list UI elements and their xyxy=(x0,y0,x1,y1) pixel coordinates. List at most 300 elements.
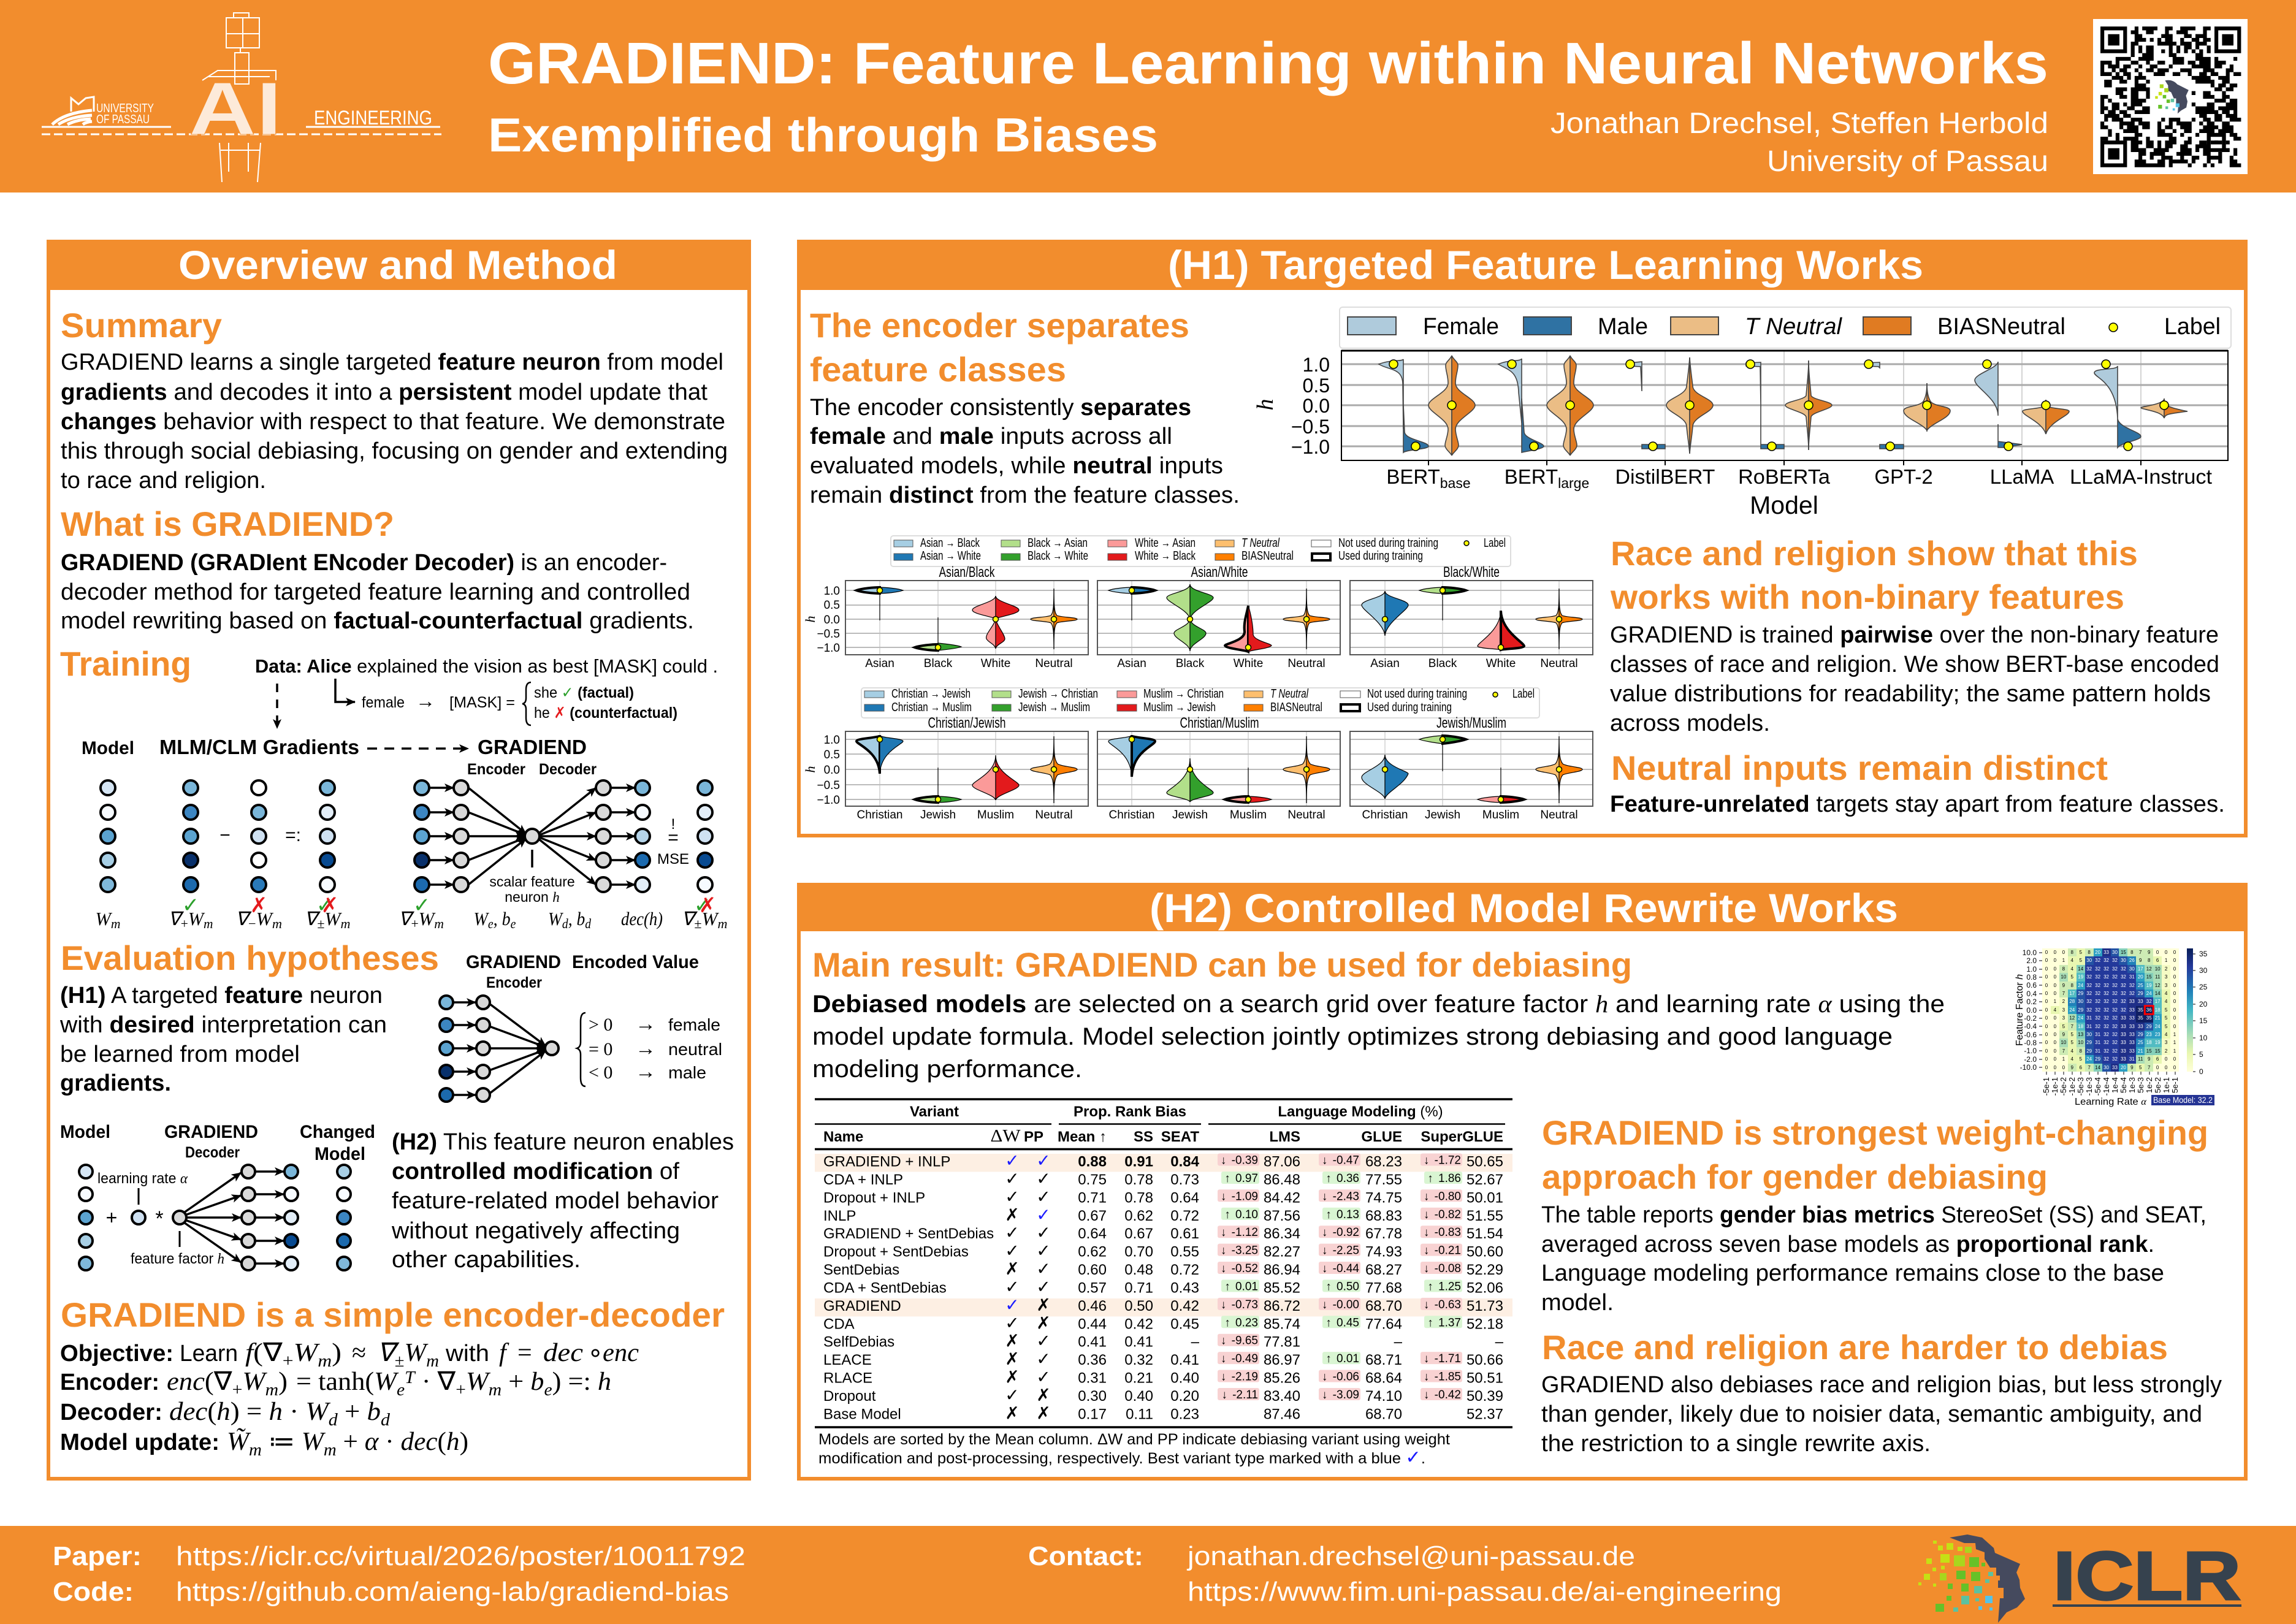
training diagram: Data: Alice explained the vision as best [MASK] could . xyxy=(255,655,718,677)
H2 hypothesis text: feature-related model behavior xyxy=(392,1188,719,1214)
axis labels: BERT xyxy=(1386,465,1440,488)
heatmap: 32 xyxy=(2121,983,2126,988)
heatmap: 32 xyxy=(2103,991,2109,996)
math labels: m xyxy=(718,916,727,931)
table rows: ↑ 0.01 xyxy=(1325,1352,1359,1365)
formulas: Learn xyxy=(180,1341,238,1367)
heatmap: 0 xyxy=(2173,983,2176,988)
heatmap: 14 xyxy=(2095,1065,2100,1070)
table rows: – xyxy=(1394,1334,1403,1351)
heatmap: 33 xyxy=(2112,1065,2118,1070)
axis labels: −1.0 xyxy=(1291,436,1330,458)
math labels: d xyxy=(585,916,592,931)
table rows: GRADIEND + INLP xyxy=(823,1154,950,1170)
heatmap: 31 xyxy=(2086,1015,2092,1021)
table rows: ↓ -0.06 xyxy=(1322,1371,1359,1383)
table rows: 74.75 xyxy=(1365,1189,1402,1206)
heatmap: 0 xyxy=(2045,1040,2048,1045)
table note: Models are sorted by the Mean column. ΔW and PP indicate debiasing variant using weight xyxy=(818,1431,1450,1448)
heatmap: 0 xyxy=(2165,1056,2167,1062)
table rows: ✗ xyxy=(1036,1313,1051,1333)
heatmap: 0 xyxy=(2045,999,2048,1004)
heatmap: 0 xyxy=(2045,1024,2048,1029)
table rows: 51.55 xyxy=(1466,1208,1503,1224)
heatmap: 30 xyxy=(2129,966,2135,972)
race legend: White → Asian xyxy=(1135,536,1196,550)
heatmap: 4 xyxy=(2071,958,2073,963)
training diagram: − xyxy=(219,825,231,845)
heatmap: 24 xyxy=(2155,1024,2161,1029)
table rows: 0.42 xyxy=(1124,1316,1153,1332)
H1 hypothesis text: with desired interpretation can xyxy=(59,1012,387,1038)
formulas: ∇ xyxy=(377,1339,394,1367)
heatmap: 32 xyxy=(2112,1015,2118,1021)
table rows: 0.91 xyxy=(1124,1154,1153,1170)
table group headers: LMS xyxy=(1269,1129,1300,1145)
heatmap: 18 xyxy=(2078,1024,2083,1029)
table rows: 0.11 xyxy=(1126,1406,1153,1422)
table rows: 50.51 xyxy=(1466,1370,1503,1387)
heatmap: 32 xyxy=(2095,1007,2100,1013)
legend: BIASNeutral xyxy=(1937,314,2065,340)
heading: race and religion: works with non-binary features xyxy=(1610,578,2124,616)
heatmap: 25 xyxy=(2138,1040,2143,1045)
table rows: ✓ xyxy=(1036,1168,1051,1189)
strongest approach text: The table reports gender bias metrics StereoSet (SS) and SEAT, xyxy=(1541,1202,2206,1228)
formulas: W xyxy=(466,1368,491,1396)
legend: Female xyxy=(1423,314,1499,340)
heatmap: 17 xyxy=(2069,991,2075,996)
heatmap: 0 xyxy=(2173,1056,2176,1062)
main result text xyxy=(812,990,1945,1083)
math labels: ± xyxy=(694,916,702,931)
heatmap: 31 xyxy=(2086,1024,2092,1029)
heatmap: 9 xyxy=(2062,983,2065,988)
table rows: 68.71 xyxy=(1365,1352,1402,1368)
encoder diagram with encoded value: female xyxy=(668,1015,720,1034)
table group headers: PP xyxy=(1024,1129,1043,1145)
race plot titles: Asian/Black xyxy=(939,564,995,581)
heatmap: 35 xyxy=(2199,950,2208,958)
math labels: W xyxy=(702,908,720,929)
heatmap: 32 xyxy=(2095,1015,2100,1021)
heatmap: 0 xyxy=(2054,1048,2056,1054)
table rows: ↑ 0.50 xyxy=(1325,1280,1359,1293)
summary text: GRADIEND learns a single targeted feature neuron from model xyxy=(61,349,723,375)
heatmap: 19 xyxy=(2146,983,2152,988)
heatmap: 32 xyxy=(2095,991,2100,996)
table rows: ↑ 0.97 xyxy=(1224,1172,1258,1185)
heatmap: 0 xyxy=(2173,1024,2176,1029)
training diagram: female xyxy=(362,694,405,711)
axis labels: Model xyxy=(1750,491,1818,519)
table rows: ✗ xyxy=(1005,1331,1020,1351)
heatmap: 21 xyxy=(2138,1048,2143,1054)
heatmap: 0 xyxy=(2199,1067,2203,1076)
table group headers: Name xyxy=(823,1129,863,1145)
heatmap: 33 xyxy=(2103,950,2109,955)
race plot titles xyxy=(939,564,1500,581)
encoder diagram with encoded value: = 0 xyxy=(589,1039,612,1059)
heatmap: 4 xyxy=(2054,1007,2056,1013)
table rows: ✓ xyxy=(1036,1331,1051,1351)
formulas: + xyxy=(283,1352,294,1371)
religion axis labels: 1.0 xyxy=(824,734,840,747)
heatmap: 19 xyxy=(2155,1040,2161,1045)
heatmap: 25 xyxy=(2199,983,2208,991)
heatmap: 5 xyxy=(2139,1065,2142,1070)
table rows: Dropout xyxy=(823,1388,876,1405)
heatmap: 32 xyxy=(2129,983,2135,988)
heatmap: -1e-1 xyxy=(2050,1077,2059,1096)
heatmap: 5 xyxy=(2062,1024,2065,1029)
table rows: ↓ -2.11 xyxy=(1221,1389,1258,1401)
subtitle: Exemplified through Biases xyxy=(488,108,1158,162)
table rows: ↓ -0.52 xyxy=(1221,1262,1258,1275)
heatmap: -5e-1 xyxy=(2042,1077,2051,1096)
heatmap: 33 xyxy=(2129,999,2135,1004)
training diagram: MSE xyxy=(657,851,689,867)
table rows: ✗ xyxy=(1005,1205,1020,1225)
race legend: Asian → Black xyxy=(920,536,980,550)
panel heading: (H2) Controlled Model Rewrite Works xyxy=(1150,885,1898,931)
heatmap: 32 xyxy=(2095,999,2100,1004)
formulas: e xyxy=(397,1381,405,1400)
harder to debias text: the restriction to a single rewrite axis. xyxy=(1541,1431,1931,1457)
table rows: ✓ xyxy=(1005,1150,1020,1171)
axis labels: 0.0 xyxy=(1303,395,1330,417)
race legend: BIASNeutral xyxy=(1241,549,1294,563)
religion axis labels: Jewish xyxy=(920,809,956,822)
heatmap: Learning Rate α xyxy=(2075,1097,2147,1107)
formulas: dec xyxy=(543,1339,583,1367)
heatmap: 9 xyxy=(2139,958,2142,963)
religion axis labels: −1.0 xyxy=(817,794,840,807)
heatmap: 10 xyxy=(2199,1034,2208,1042)
heatmap: 4 xyxy=(2165,991,2167,996)
strongest approach text: averaged across seven base models as proportional rank. xyxy=(1541,1232,2154,1257)
heatmap: 0 xyxy=(2045,950,2048,955)
heatmap: 20 xyxy=(2138,974,2143,980)
table note xyxy=(818,1431,1450,1468)
heatmap: 32 xyxy=(2103,974,2109,980)
table rows: ✗ xyxy=(1036,1385,1051,1405)
formulas: T xyxy=(405,1368,416,1387)
encoder diagram with encoded value: male xyxy=(668,1063,706,1082)
heatmap: 0 xyxy=(2173,991,2176,996)
check and cross marks: ✓ xyxy=(694,893,711,918)
table rows: ✓ xyxy=(1005,1295,1020,1315)
heatmap: 32 xyxy=(2121,999,2126,1004)
axis labels: 0.5 xyxy=(1303,375,1330,397)
table rows: ↓ -0.63 xyxy=(1424,1298,1461,1311)
strongest approach text: Language modeling performance remains close to the base xyxy=(1541,1260,2164,1286)
footer contact: https://www.fim.uni-passau.de/ai-engineering xyxy=(1188,1577,1782,1607)
race axis labels: Neutral xyxy=(1540,657,1578,670)
heatmap: 33 xyxy=(2138,999,2143,1004)
table rows: 0.23 xyxy=(1170,1406,1199,1422)
heatmap: 26 xyxy=(2129,958,2135,963)
decoder diagram: Model xyxy=(315,1144,365,1164)
table rows: 0.21 xyxy=(1124,1370,1153,1387)
table rows: 0.62 xyxy=(1078,1244,1107,1260)
race axis labels: White xyxy=(1486,657,1516,670)
math labels: ∇ xyxy=(235,908,248,929)
table rows: 0.30 xyxy=(1078,1388,1107,1405)
heatmap: 32 xyxy=(2112,1024,2118,1029)
heatmap: 14 xyxy=(2078,966,2083,972)
heatmap: 18 xyxy=(2155,1007,2161,1013)
heatmap: 32 xyxy=(2086,966,2092,972)
table rows: ↓ -0.73 xyxy=(1221,1298,1258,1311)
heatmap: 32 xyxy=(2095,958,2100,963)
decoder diagram: GRADIEND xyxy=(164,1122,258,1142)
heatmap: 10 xyxy=(2155,966,2161,972)
table rows: 82.27 xyxy=(1264,1244,1300,1260)
race axis labels: White xyxy=(981,657,1010,670)
table rows: 0.64 xyxy=(1078,1226,1107,1242)
table rows: 0.41 xyxy=(1124,1334,1153,1351)
religion violin plots xyxy=(803,687,1593,822)
race legend: Not used during training xyxy=(1338,536,1438,550)
table rows: GRADIEND + SentDebias xyxy=(823,1226,994,1242)
heatmap: 5e-4 xyxy=(2119,1077,2128,1093)
heatmap: 9 xyxy=(2130,1065,2134,1070)
encoder diagram with encoded value xyxy=(440,952,722,1102)
heatmap: 1 xyxy=(2062,1056,2065,1062)
heatmap: 32 xyxy=(2095,966,2100,972)
table rows: CDA + SentDebias xyxy=(823,1279,947,1296)
neutral violins xyxy=(1428,356,2187,456)
math labels: + xyxy=(181,916,188,931)
table rows: 74.93 xyxy=(1365,1244,1402,1260)
table rows: ✓ xyxy=(1036,1259,1051,1279)
heatmap: 5 xyxy=(2199,1050,2203,1059)
heatmap: 20 xyxy=(2095,950,2100,955)
heading: summary: Summary xyxy=(61,306,222,345)
heatmap: 35 xyxy=(2138,1007,2143,1013)
formulas: W xyxy=(242,1368,268,1396)
heatmap: -5e-2 xyxy=(2059,1077,2068,1096)
axis labels: RoBERTa xyxy=(1738,465,1831,488)
religion plot titles: Christian/Muslim xyxy=(1180,715,1259,731)
religion label dots xyxy=(877,737,1562,802)
heading: race and religion xyxy=(1610,534,2138,616)
axis labels: GPT-2 xyxy=(1874,465,1933,488)
math labels: d xyxy=(562,916,569,931)
heatmap: 2 xyxy=(2062,999,2065,1004)
heatmap: 32 xyxy=(2112,983,2118,988)
heatmap: 35 xyxy=(2146,1015,2152,1021)
table group headers: SEAT xyxy=(1161,1129,1199,1145)
H2 hypothesis text: controlled modification of xyxy=(392,1159,679,1184)
table rows: 0.67 xyxy=(1124,1226,1153,1242)
formulas: d xyxy=(381,1411,391,1430)
heatmap: 3 xyxy=(2062,1007,2065,1013)
decoder diagram: learning rate α xyxy=(97,1170,188,1187)
heatmap: 32 xyxy=(2103,1056,2109,1062)
heatmap xyxy=(2015,948,2214,1107)
table rows: ↑ 0.23 xyxy=(1224,1316,1258,1329)
heatmap: 0 xyxy=(2054,1024,2056,1029)
race violin plots xyxy=(803,536,1593,670)
table rows: 68.70 xyxy=(1365,1298,1402,1314)
heatmap: 33 xyxy=(2129,1024,2135,1029)
encoder text: The encoder consistently separates xyxy=(810,395,1191,421)
heatmap: 1 xyxy=(2173,1040,2176,1045)
heatmap: 31 xyxy=(2129,1056,2135,1062)
heatmap: 1 xyxy=(2062,958,2065,963)
heatmap: 32 xyxy=(2112,991,2118,996)
heatmap: 5 xyxy=(2079,950,2082,955)
heatmap: 6 xyxy=(2079,1065,2082,1070)
table rows: ✓ xyxy=(1036,1241,1051,1261)
H1 hypothesis text: (H1) A targeted feature neuron xyxy=(60,983,383,1008)
legend xyxy=(1340,307,2231,348)
religion axis labels: Neutral xyxy=(1287,809,1325,822)
encoder diagram with encoded value: > 0 xyxy=(589,1015,612,1035)
table rows: ↓ -0.21 xyxy=(1424,1245,1461,1257)
heatmap: 7 xyxy=(2139,950,2142,955)
heatmap: 6 xyxy=(2156,958,2159,963)
heatmap: 32 xyxy=(2146,999,2152,1004)
training diagram: =: xyxy=(285,825,301,845)
table rows: ↑ 1.86 xyxy=(1427,1172,1461,1185)
logo: University of Passau AI Engineering: ENGINEERING xyxy=(314,107,432,129)
formulas: + xyxy=(456,1381,466,1400)
heatmap: 0 xyxy=(2054,1015,2056,1021)
heatmap: 29 xyxy=(2146,1024,2152,1029)
authors: Jonathan Drechsel, Steffen Herbold xyxy=(1550,107,2048,140)
race axis labels: 0.0 xyxy=(824,614,840,627)
heatmap: 0 xyxy=(2045,966,2048,972)
religion legend: Muslim → Christian xyxy=(1143,687,1224,701)
training diagram: Model xyxy=(82,738,134,758)
heatmap: -1e-2 xyxy=(2067,1077,2077,1096)
heatmap: 0 xyxy=(2045,1056,2048,1062)
table note: modification and post-processing, respectively. Best variant type marked with a blue ✓. xyxy=(818,1447,1425,1468)
race axis labels: −0.5 xyxy=(817,628,840,641)
religion legend: Not used during training xyxy=(1367,687,1467,701)
heatmap: Base Model: 32.2 xyxy=(2153,1096,2213,1105)
neutral inputs text: Feature-unrelated targets stay apart from feature classes. xyxy=(1610,791,2225,817)
decoder diagram xyxy=(60,1122,375,1270)
math labels: − xyxy=(248,916,256,931)
decoder diagram: Changed xyxy=(300,1122,375,1142)
heatmap: 5 xyxy=(2071,1040,2073,1045)
heatmap: 8 xyxy=(2088,950,2091,955)
table rows: 0.71 xyxy=(1078,1189,1107,1206)
math labels: W xyxy=(96,908,111,929)
table rows: ✓ xyxy=(1005,1313,1020,1333)
table rows: 50.39 xyxy=(1466,1388,1503,1405)
math labels: e xyxy=(511,916,516,931)
table rows: LEACE xyxy=(823,1352,872,1368)
H1 hypothesis text: gradients. xyxy=(60,1070,171,1096)
heatmap: 5e-1 xyxy=(2170,1077,2180,1093)
religion legend: Label xyxy=(1512,687,1535,701)
heatmap: 0 xyxy=(2173,1015,2176,1021)
heatmap: 14 xyxy=(2155,991,2161,996)
QR code xyxy=(2093,19,2248,174)
table rows: 86.94 xyxy=(1264,1262,1300,1278)
violin chart: gender xyxy=(1253,307,2231,519)
table rows: GRADIEND xyxy=(823,1298,901,1314)
heatmap: 5 xyxy=(2079,1056,2082,1062)
table rows: ↓ -1.12 xyxy=(1221,1226,1258,1239)
heatmap: 32 xyxy=(2112,1040,2118,1045)
table rows: 86.34 xyxy=(1264,1226,1300,1242)
table rows: 68.27 xyxy=(1365,1262,1402,1278)
formulas: ≈ xyxy=(352,1339,366,1367)
heatmap: -0.8 xyxy=(2024,1039,2037,1047)
heatmap: 5 xyxy=(2165,1015,2167,1021)
heatmap: 24 xyxy=(2078,1015,2083,1021)
check and cross marks: ✗ xyxy=(250,893,267,918)
encoder diagram with encoded value: < 0 xyxy=(589,1062,612,1083)
heatmap: 32 xyxy=(2112,958,2118,963)
race axis labels: Neutral xyxy=(1287,657,1325,670)
heatmap: 0 xyxy=(2054,974,2056,980)
formulas: + xyxy=(232,1381,242,1400)
logo: University of Passau AI Engineering: OF PASSAU xyxy=(96,113,150,126)
heatmap: 20 xyxy=(2121,1065,2126,1070)
formulas: d xyxy=(329,1411,338,1430)
affiliation: University of Passau xyxy=(1767,145,2048,178)
heatmap: 0 xyxy=(2173,1007,2176,1013)
heatmap: 24 xyxy=(2069,1007,2075,1013)
heatmap: 0 xyxy=(2173,958,2176,963)
formulas: ) =: xyxy=(552,1368,598,1396)
check and cross marks: ✓ xyxy=(413,893,430,918)
formulas: enc(∇ xyxy=(167,1368,231,1396)
table rows: 0.84 xyxy=(1170,1154,1200,1170)
heatmap: 29 xyxy=(2138,1032,2143,1037)
encoder diagram with encoded value: Encoder xyxy=(486,974,542,991)
table group headers: Variant xyxy=(910,1104,959,1120)
table rows: 87.06 xyxy=(1264,1154,1300,1170)
race legend xyxy=(891,536,1511,566)
table rows: 68.64 xyxy=(1365,1370,1402,1387)
race legend: T Neutral xyxy=(1241,536,1280,550)
table rows: Dropout + INLP xyxy=(823,1189,925,1206)
decoder diagram: * xyxy=(155,1207,164,1230)
table rows: ✗ xyxy=(1005,1367,1020,1387)
decoder diagram: feature factor h xyxy=(131,1251,224,1267)
table rows: ✓ xyxy=(1036,1276,1051,1297)
heatmap: 7 xyxy=(2148,1065,2150,1070)
math labels: m xyxy=(204,916,213,931)
formulas: = xyxy=(517,1339,532,1367)
heatmap: 0 xyxy=(2156,1065,2159,1070)
H1 hypothesis text xyxy=(59,983,387,1096)
encoder decoder network xyxy=(414,780,650,905)
table rows: ↓ -3.09 xyxy=(1322,1389,1359,1401)
table rows: 0.72 xyxy=(1170,1262,1199,1278)
heatmap: 36 xyxy=(2146,1007,2152,1013)
religion axis labels: 0.0 xyxy=(824,764,840,777)
table rows: 87.46 xyxy=(1264,1406,1300,1422)
table rows: 0.62 xyxy=(1124,1208,1153,1224)
H1 hypothesis text: be learned from model xyxy=(60,1042,300,1067)
religion legend: Used during training xyxy=(1367,701,1452,714)
math labels: W xyxy=(256,908,274,929)
table rows: 0.32 xyxy=(1124,1352,1153,1368)
religion axis labels: Jewish xyxy=(1172,809,1208,822)
heatmap: 15 xyxy=(2199,1016,2208,1025)
race violins xyxy=(856,584,1582,652)
heatmap: -1.0 xyxy=(2024,1046,2037,1055)
